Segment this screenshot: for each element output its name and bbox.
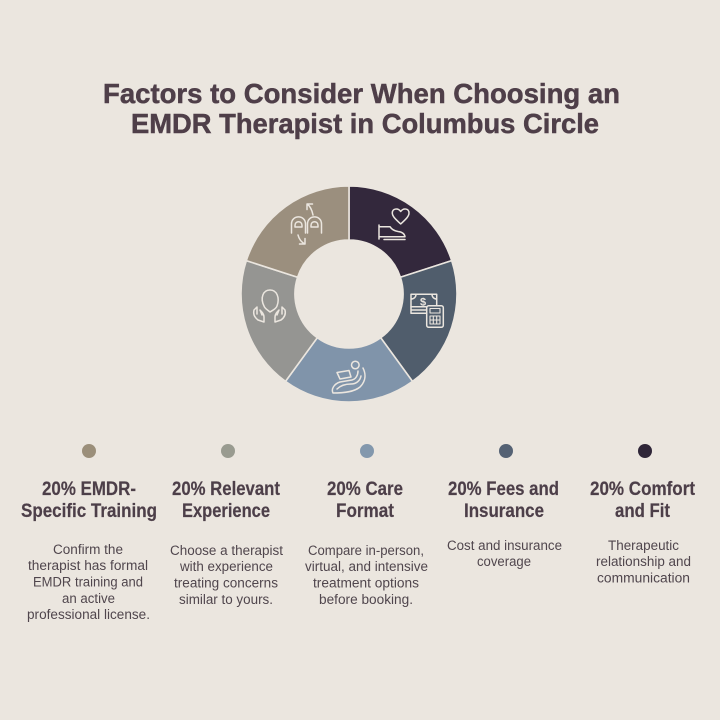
heading: EMDR training: Specific Training — [21, 501, 157, 522]
legend dot: EMDR training — [82, 444, 96, 458]
text: care format: before booking. — [319, 592, 413, 607]
heading: EMDR training: 20% EMDR- — [42, 479, 136, 500]
icon: money and calculator: $ — [420, 296, 426, 308]
segment: fees and insurance — [381, 261, 457, 381]
heading: relevant experience: Experience — [182, 501, 270, 522]
heading: fees and insurance: Insurance — [464, 501, 544, 522]
text: EMDR training: professional license. — [27, 607, 150, 622]
legend dot: care format — [360, 444, 374, 458]
heading: relevant experience — [172, 479, 281, 522]
text: relevant experience — [170, 543, 283, 607]
heading: comfort and fit: and Fit — [615, 501, 671, 522]
text: EMDR training: therapist has formal — [28, 558, 148, 573]
icon: money and calculator — [411, 294, 443, 327]
text: care format: treatment options — [313, 576, 419, 590]
text: comfort and fit: communication — [597, 570, 690, 586]
title — [103, 78, 620, 139]
segment: care format — [286, 338, 412, 402]
column: EMDR training — [21, 479, 157, 622]
icon: person with laptop — [332, 361, 365, 393]
icon: heart and bed — [379, 209, 409, 240]
text: comfort and fit — [596, 538, 691, 586]
text: EMDR training — [27, 542, 150, 622]
text: fees and insurance — [447, 538, 562, 569]
text: fees and insurance: coverage — [477, 554, 531, 569]
text: relevant experience: with experience — [179, 559, 273, 574]
text: EMDR training: Confirm the — [53, 542, 123, 557]
heading: care format: 20% Care — [327, 479, 403, 500]
segment: relevant experience — [241, 261, 317, 381]
column: relevant experience — [170, 479, 283, 607]
text: relevant experience: Choose a therapist — [170, 543, 283, 558]
heading: fees and insurance — [448, 479, 559, 522]
heading: fees and insurance: 20% Fees and — [448, 479, 559, 500]
text: relevant experience: similar to yours. — [179, 592, 273, 607]
title: Factors to Consider When Choosing an — [103, 78, 620, 109]
heading: comfort and fit — [590, 479, 696, 522]
text: comfort and fit: Therapeutic — [608, 538, 679, 553]
segment: comfort and fit — [349, 186, 452, 277]
heading: relevant experience: 20% Relevant — [172, 479, 281, 500]
text: EMDR training: EMDR training and — [33, 575, 143, 590]
icon: hands holding person — [254, 290, 285, 322]
legend dot: fees and insurance — [499, 444, 513, 458]
text: care format — [305, 543, 428, 607]
text: care format: Compare in-person, — [308, 543, 424, 558]
legend dot: relevant experience — [221, 444, 235, 458]
heading: care format — [327, 479, 403, 522]
text: EMDR training: an active — [62, 591, 115, 606]
text: care format: virtual, and intensive — [305, 559, 428, 574]
text: comfort and fit: relationship and — [596, 554, 691, 569]
legend dot: comfort and fit — [638, 444, 652, 458]
heading: EMDR training — [21, 479, 157, 522]
text: fees and insurance: Cost and insurance — [447, 538, 562, 553]
title: EMDR Therapist in Columbus Circle — [131, 108, 599, 139]
donut chart — [241, 186, 457, 402]
segment: EMDR training — [246, 186, 349, 277]
text: relevant experience: treating concerns — [174, 576, 278, 590]
column: care format — [305, 479, 428, 607]
heading: comfort and fit: 20% Comfort — [590, 479, 696, 500]
column: comfort and fit — [590, 479, 696, 586]
heading: care format: Format — [336, 501, 395, 522]
icon: EMDR fingers with arrows — [292, 204, 322, 244]
column: fees and insurance — [447, 479, 562, 569]
